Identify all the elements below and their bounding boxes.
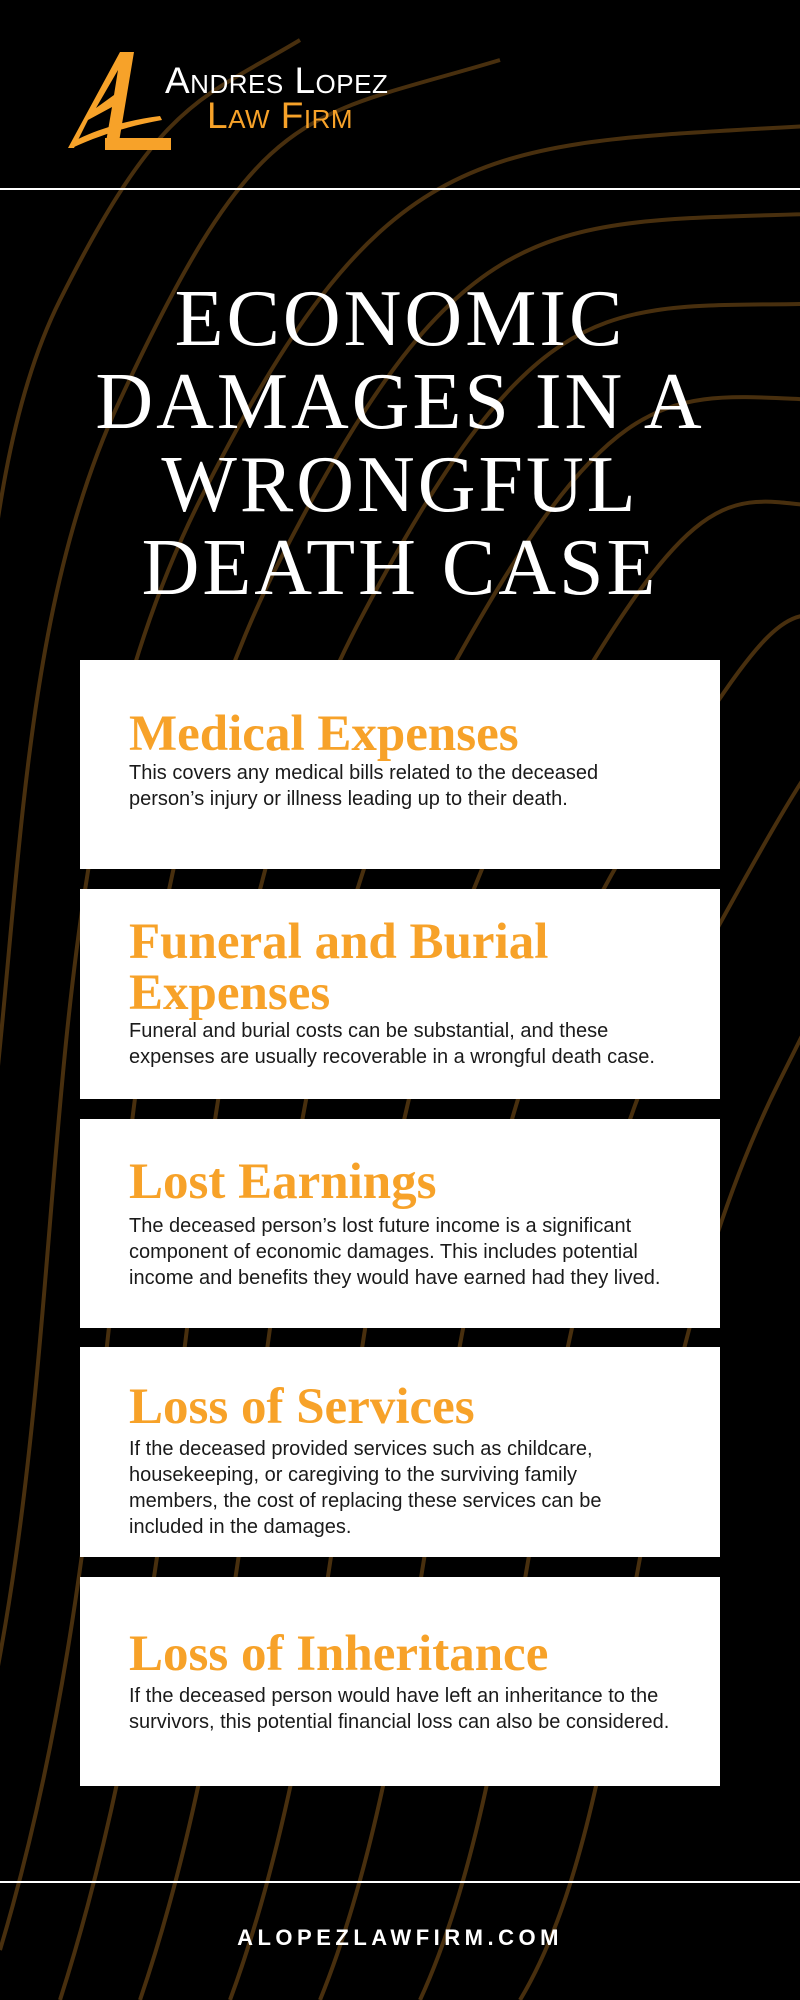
title: ECONOMIC: [175, 275, 625, 363]
heading: Medical Expenses: [129, 706, 519, 762]
icon: AL monogram: [68, 52, 171, 150]
heading: [129, 914, 548, 1021]
footer url: ALOPEZLAWFIRM.COM: [237, 1925, 563, 1950]
heading: Funeral and Burial: [129, 914, 548, 970]
heading: Loss of Inheritance: [129, 1626, 548, 1682]
title: [95, 275, 705, 612]
panel: medical expenses: [80, 660, 720, 869]
heading: Expenses: [129, 965, 330, 1021]
panel: funeral and burial: [80, 889, 720, 1099]
panel: lost earnings: [80, 1119, 720, 1328]
text: If the deceased provided services such as childcare, housekeeping, or caregiving to the surviving family members, the cost of replacing these services can be included in the damages.: [129, 1438, 601, 1538]
logo: [68, 52, 388, 150]
title: DAMAGES IN A: [95, 358, 705, 446]
text: Funeral and burial costs can be substantial, and these expenses are usually recoverable in a wrongful death case.: [129, 1020, 655, 1068]
heading: Loss of Services: [129, 1379, 475, 1435]
title: DEATH CASE: [142, 524, 658, 612]
text: The deceased person’s lost future income is a significant component of economic damages. This includes potential income and benefits they would have earned had they lived.: [129, 1215, 660, 1289]
text: This covers any medical bills related to the deceased person’s injury or illness leading up to their death.: [129, 762, 598, 810]
text: If the deceased person would have left an inheritance to the survivors, this potential financial loss can also be considered.: [129, 1685, 669, 1733]
heading: Lost Earnings: [129, 1154, 436, 1210]
panel: loss of services: [80, 1347, 720, 1557]
logo text: Andres Lopez: [165, 60, 388, 101]
logo: Law Firm: [207, 95, 353, 136]
title: WRONGFUL: [161, 441, 639, 529]
panel: loss of inheritance: [80, 1577, 720, 1786]
